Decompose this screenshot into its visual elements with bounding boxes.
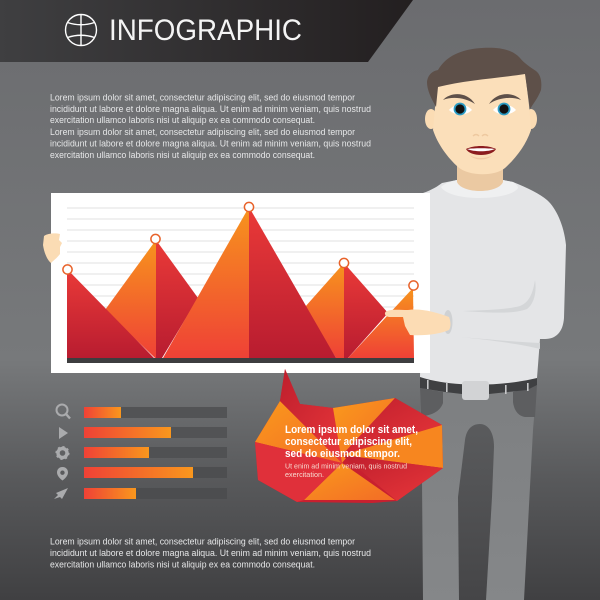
trouser gap between legs — [458, 424, 494, 600]
mountain chart — [63, 202, 418, 363]
belt buckle — [462, 381, 489, 400]
nose — [473, 134, 488, 136]
progress bars — [54, 404, 227, 499]
bubble facets — [255, 369, 443, 503]
text block: bottom paragraph: Lorem ipsum dolor sit amet, consectetur adipiscing elit, sed do eiusmod tempor — [50, 536, 355, 546]
header banner — [0, 0, 413, 62]
belt — [420, 377, 537, 394]
bubble heading: sed do eiusmod tempor. — [285, 448, 400, 460]
bar track 2 — [84, 427, 227, 438]
icon: paper plane — [54, 488, 68, 499]
eyes — [449, 103, 516, 115]
text block: top paragraphs: exercitation ullamco laboris nisi ut aliquip ex ea commodo consequat. — [50, 150, 315, 160]
icon: play — [59, 427, 68, 439]
title: INFOGRAPHIC — [109, 14, 302, 47]
hair — [427, 48, 541, 109]
neck — [457, 160, 503, 191]
bubble heading: consectetur adipiscing elit, — [285, 436, 412, 448]
axis — [67, 358, 414, 363]
collar — [441, 180, 518, 198]
icon: search — [56, 404, 70, 418]
person: left hand — [43, 233, 62, 263]
text block: bottom paragraph: exercitation ullamco laboris nisi ut aliquip ex ea commodo consequat. — [50, 560, 315, 570]
belt loops — [427, 380, 529, 394]
bubble heading — [285, 424, 418, 460]
sweater — [420, 180, 566, 385]
icon: location pin — [57, 467, 68, 480]
chart board — [51, 193, 430, 373]
text block: top paragraphs: exercitation ullamco laboris nisi ut aliquip ex ea commodo consequat. — [50, 115, 315, 125]
mouth — [466, 146, 496, 160]
icon: globe — [66, 14, 96, 46]
trousers — [420, 380, 537, 600]
text block: top paragraphs: Lorem ipsum dolor sit amet, consectetur adipiscing elit, sed do eiusmod tempor — [50, 127, 355, 137]
person: pointing hand and cuff — [385, 309, 452, 335]
icon: gear — [56, 447, 69, 459]
bubble small text: Ut enim ad minim veniam, quis nostrud — [285, 462, 407, 470]
text block: top paragraphs: Lorem ipsum dolor sit amet, consectetur adipiscing elit, sed do eiusmod tempor — [50, 92, 355, 102]
text block: bottom paragraph: incididunt ut labore et dolore magna aliqua. Ut enim ad minim veniam, quis nostrud — [50, 548, 371, 558]
speech bubble callout — [255, 369, 443, 503]
peak markers — [63, 202, 418, 290]
pockets — [420, 385, 537, 417]
bubble small text — [285, 462, 407, 479]
text block: top paragraphs: incididunt ut labore et dolore magna aliqua. Ut enim ad minim veniam, quis nostrud — [50, 138, 371, 148]
text block: top paragraphs — [50, 92, 371, 160]
eyebrows — [443, 94, 521, 104]
bar track 5 — [84, 488, 227, 499]
face — [433, 72, 531, 174]
bar track 4 — [84, 467, 227, 478]
sweater folds — [460, 280, 540, 349]
bubble heading: Lorem ipsum dolor sit amet, — [285, 424, 418, 436]
chart grid lines — [67, 208, 414, 307]
person: head — [425, 48, 541, 174]
ears — [425, 109, 537, 129]
text block: bottom paragraph — [50, 536, 371, 570]
bar track 3 — [84, 447, 227, 458]
bubble small text: exercitation. — [285, 470, 324, 479]
bar track 1 — [84, 407, 227, 418]
text block: top paragraphs: incididunt ut labore et dolore magna aliqua. Ut enim ad minim veniam, quis nostrud — [50, 104, 371, 114]
person: presenter body — [420, 160, 566, 600]
